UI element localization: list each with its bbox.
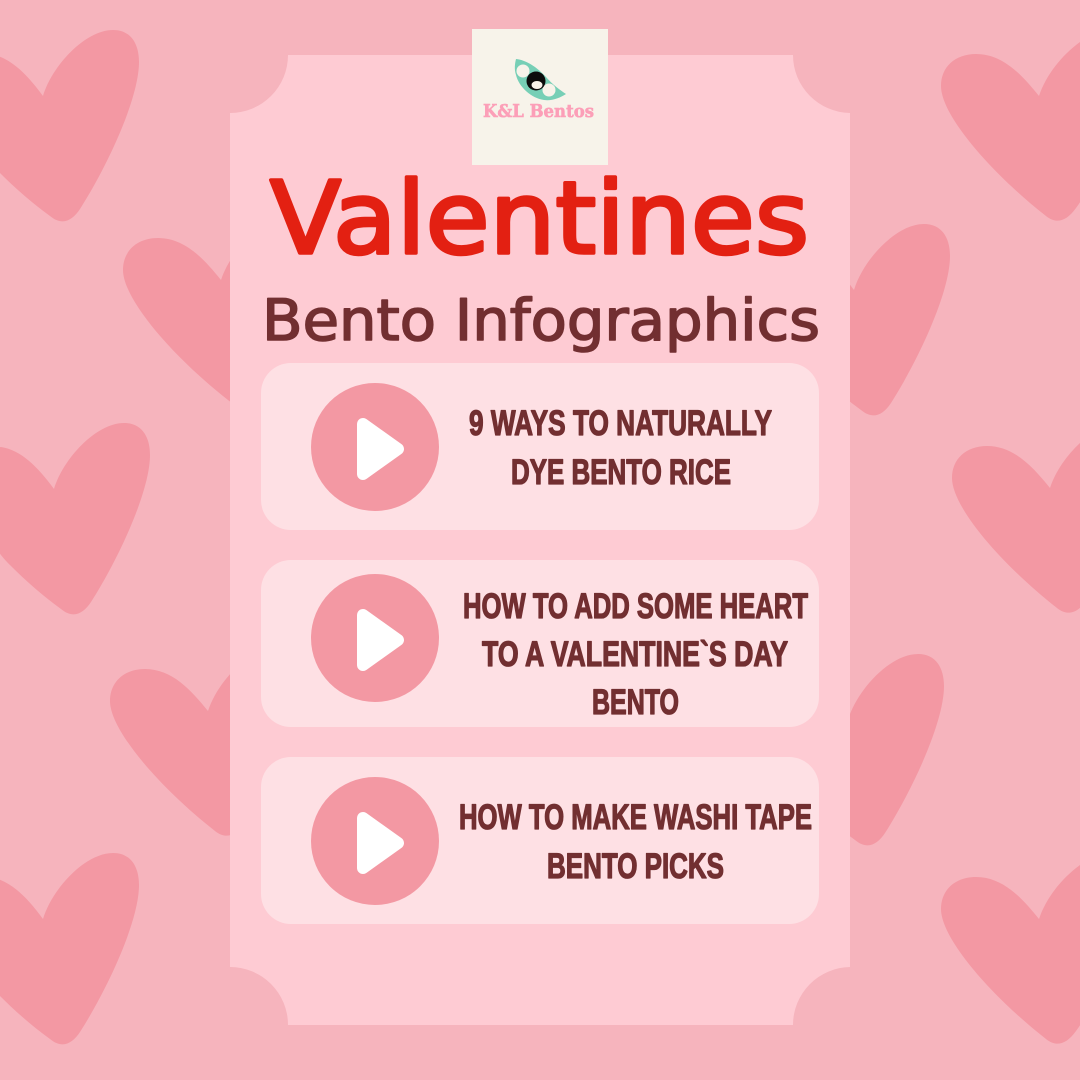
card text — [469, 404, 772, 492]
card 1 — [261, 363, 819, 530]
icon: play button — [311, 574, 439, 702]
heart: middle left — [0, 423, 150, 614]
card background — [261, 757, 819, 924]
line 1: 9 WAYS TO NATURALLY — [469, 404, 772, 443]
panel: ticket-shaped backing — [230, 55, 850, 1025]
heart: middle right — [952, 428, 1080, 613]
line 1: HOW TO MAKE WASHI TAPE — [459, 798, 812, 837]
play circle — [311, 383, 439, 511]
heart: inner right upper — [776, 224, 950, 415]
card background — [261, 363, 819, 530]
play triangle — [363, 615, 398, 665]
face — [532, 81, 542, 89]
icon: pea pod — [515, 59, 566, 100]
line 2: TO A VALENTINE`S DAY — [482, 635, 788, 674]
pea left — [516, 64, 530, 78]
card text — [463, 587, 808, 722]
card background — [261, 560, 819, 727]
heart: inner left lower — [110, 651, 299, 836]
card 2 — [261, 560, 819, 727]
play triangle — [363, 818, 398, 868]
play circle — [311, 777, 439, 905]
icon: play button — [311, 777, 439, 905]
play circle — [311, 574, 439, 702]
heart: top right — [941, 36, 1080, 221]
pod shell — [515, 59, 566, 100]
card text — [459, 798, 812, 886]
logo wordmark: K&L Bentos — [483, 101, 594, 122]
title: Valentines — [270, 160, 809, 277]
pea right — [542, 84, 556, 96]
subtitle: Bento Infographics — [262, 288, 820, 354]
line 1: HOW TO ADD SOME HEART — [463, 587, 808, 626]
play triangle — [363, 424, 398, 474]
heart: bottom right — [941, 859, 1080, 1044]
card 3 — [261, 757, 819, 924]
logo: K&L Bentos — [472, 29, 608, 165]
line 2: BENTO PICKS — [547, 847, 724, 886]
line 2: DYE BENTO RICE — [511, 453, 731, 492]
hair — [526, 72, 546, 90]
heart: inner left upper — [123, 220, 312, 405]
heart: inner right lower — [770, 654, 944, 845]
heart: bottom left — [0, 853, 139, 1044]
line 3: BENTO — [592, 683, 679, 722]
icon: play button — [311, 383, 439, 511]
heart: top left — [0, 30, 139, 221]
logo background — [472, 29, 608, 165]
